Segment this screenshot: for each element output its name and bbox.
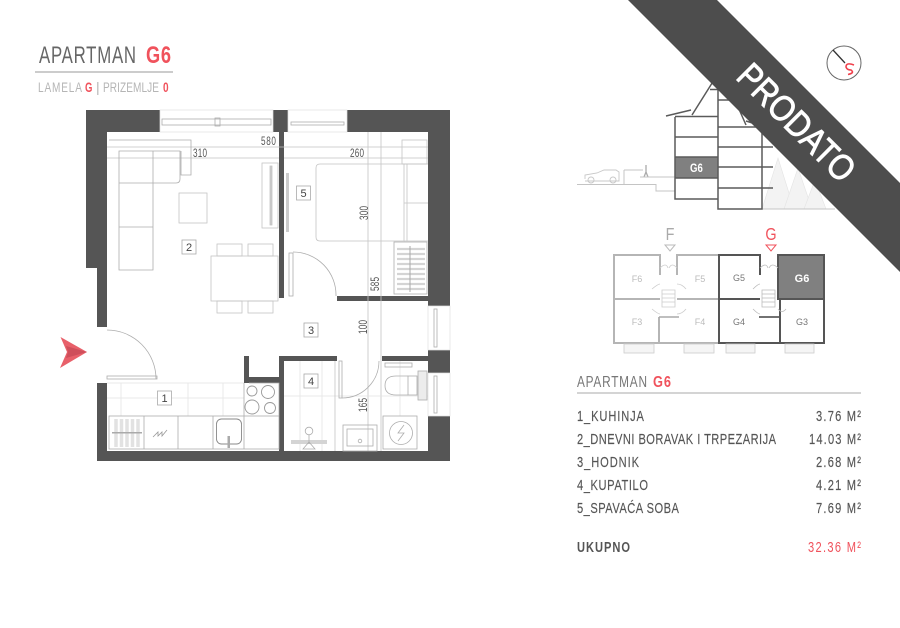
room row kuhinja: 3.76 M² [816,407,861,424]
lamela F: F4 [695,317,705,327]
room number 1 [158,391,172,405]
building section [577,80,835,209]
section outline [666,80,773,209]
building key plan [614,225,824,353]
subtitle: building and floor: LAMELA [38,79,83,95]
room number 2 [182,240,196,254]
entrance arrow [60,337,87,368]
walls [86,110,450,461]
title: APARTMAN [39,42,136,69]
room row kupatilo [577,476,861,493]
bathroom [284,361,428,451]
dimension labels: 100 [358,320,371,334]
bedroom door [289,252,336,296]
stairs F [652,265,686,314]
dimension labels: 165 [358,398,371,412]
coffee table [179,193,207,223]
room row kuhinja: 1_KUHINJA [577,407,644,424]
room row kuhinja [577,407,861,424]
bathroom door [339,361,379,398]
highlighted unit G6: G6 [690,162,703,175]
lamela F: F5 [695,274,705,284]
dimension lines [107,132,428,451]
subtitle: building and floor: 0 [163,79,169,95]
toilet [385,363,427,400]
trees [762,158,826,209]
room number 2: 2 [186,242,192,254]
room number 4: 4 [308,376,314,388]
wardrobe [394,242,427,294]
dimension labels: 260 [350,148,364,161]
total row [577,538,861,555]
subtitle: building and floor: | [96,79,100,95]
lamela G: G4 [733,317,745,327]
entrance door [107,330,157,379]
compass south mark [846,64,854,74]
highlighted unit G6 [675,157,718,178]
room row spavaca soba: 7.69 M² [816,499,861,516]
area table [577,372,862,555]
windows [160,110,450,416]
room row dnevni boravak: 14.03 M² [809,430,862,447]
lamela G: G [765,225,777,244]
room row kupatilo: 4_KUPATILO [577,476,648,493]
sink [343,425,377,451]
floor plan [60,110,450,461]
person [644,165,648,177]
kitchen [107,383,279,449]
sofa [109,140,191,270]
subtitle: building and floor: G [85,79,92,96]
title: G6 [146,42,171,69]
balconies [624,344,814,353]
lamela F: F [666,225,674,244]
lamela F: F3 [632,317,642,327]
total row: UKUPNO [577,538,630,555]
lamela F: F6 [632,274,642,284]
dimension labels: 300 [359,206,372,220]
room row hodnik [577,453,861,470]
room number 3: 3 [308,325,314,337]
lamela G: G6 [795,273,809,285]
room row dnevni boravak: 2_DNEVNI BORAVAK I TRPEZARIJA [577,430,776,447]
stairs G [753,265,786,314]
bedroom shelf [286,173,289,232]
dimension labels: 585 [370,277,383,291]
shower [291,427,327,449]
room number 4 [304,374,318,388]
car [585,170,619,183]
subtitle: building and floor [38,79,169,96]
lamela G: G3 [796,317,808,327]
sold banner: PRODATO [729,55,864,190]
room number 5 [296,186,310,200]
room number 5: 5 [300,188,307,200]
lamela F [614,225,719,343]
washing machine [383,416,417,449]
room row hodnik: 2.68 M² [816,453,861,470]
lamela G [719,225,824,343]
dimension labels: 310 [193,148,207,161]
room number 3 [304,323,318,337]
lamela G: G5 [733,273,745,283]
terrain [577,170,835,209]
room row dnevni boravak [577,430,862,447]
dining table [211,244,278,313]
sold banner [628,0,900,272]
table heading: APARTMAN [577,372,647,390]
tv unit [262,163,278,228]
room row spavaca soba [577,499,861,516]
room number 1: 1 [161,393,168,405]
compass [827,46,861,80]
subtitle: building and floor: PRIZEMLJE [103,79,159,95]
dimension labels: 580 [261,136,276,149]
total row: 32.36 M² [808,538,861,555]
dimension labels [193,136,383,412]
room row kupatilo: 4.21 M² [816,476,861,493]
bed [316,140,428,241]
room row spavaca soba: 5_SPAVAĆA SOBA [577,499,679,516]
table heading: G6 [653,374,671,391]
room row hodnik: 3_HODNIK [577,453,639,470]
